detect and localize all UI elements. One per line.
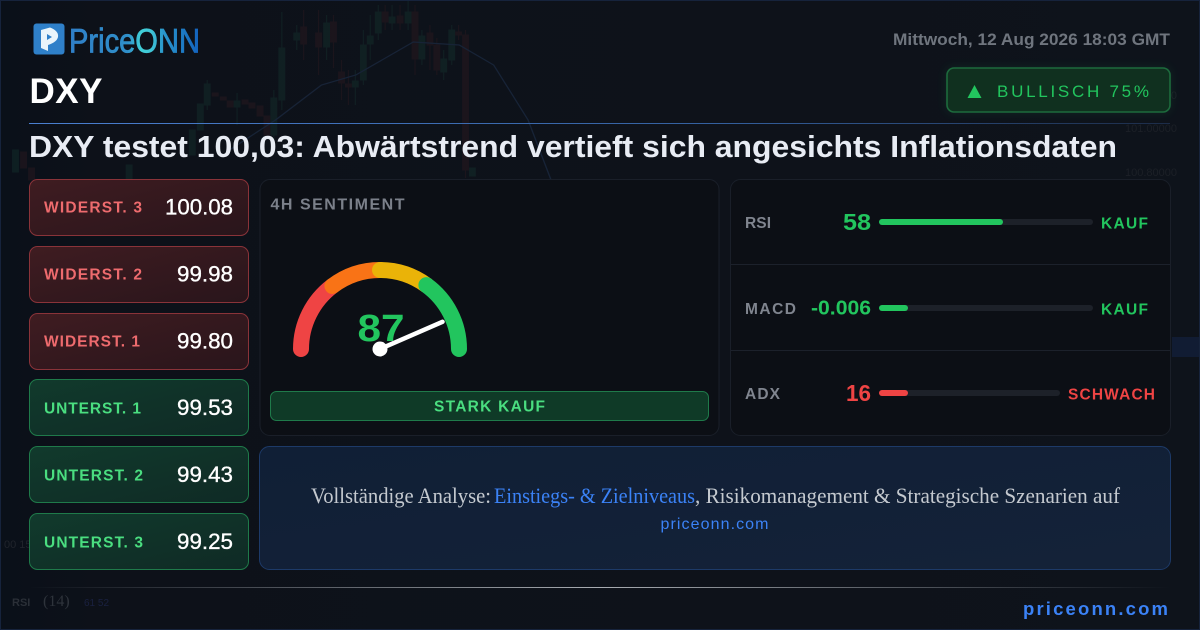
logo wordmark: PriceONN: [69, 22, 200, 60]
call to action panel: [260, 446, 1170, 570]
row: MACD: [745, 298, 1148, 320]
sentiment badge: [946, 68, 1170, 112]
row: MACD: KAUF: [1101, 302, 1148, 318]
value: 99.25: [177, 529, 233, 554]
label: UNTERST. 2: [44, 468, 143, 484]
value: 99.53: [177, 395, 233, 420]
row: RSI: RSI: [745, 215, 771, 232]
row: MACD: MACD: [745, 301, 796, 318]
footer brand: priceonn.com: [1023, 598, 1168, 619]
call to action text: , Risikomanagement & Strategische Szenarien auf: [695, 483, 1121, 508]
logo mark: [34, 24, 64, 54]
footer divider: [29, 587, 1170, 588]
logo: PriceONN: [34, 22, 200, 60]
icon: up triangle: [968, 85, 982, 98]
faint chart backdrop: RSI: [12, 597, 30, 609]
panel heading: 4H SENTIMENT: [270, 196, 405, 214]
panel: support 1: [30, 380, 248, 436]
verdict pill: STARK KAUF: [434, 398, 545, 416]
call to action text: Vollständige Analyse:: [311, 483, 491, 508]
row: ADX: 16: [846, 380, 871, 406]
headline: DXY testet 100,03: Abwärtstrend vertieft sich angesichts Inflationsdaten: [29, 130, 1117, 164]
faint chart backdrop: 100.80000: [1125, 167, 1177, 179]
faint chart backdrop: 101.00000: [1125, 123, 1177, 135]
row: MACD: -0.006: [811, 298, 871, 320]
label: WIDERST. 1: [44, 334, 140, 350]
row: ADX: SCHWACH: [1068, 386, 1155, 404]
row: ADX: ADX: [745, 386, 781, 403]
divider: [29, 123, 1170, 124]
label: WIDERST. 2: [44, 266, 142, 284]
date and time: Mittwoch, 12 Aug 2026 18:03 GMT: [893, 31, 1170, 49]
row: RSI: KAUF: [1101, 216, 1148, 232]
panel: indicators: [730, 180, 1170, 436]
panel: resistance 3: [30, 180, 248, 236]
faint chart backdrop: 101.20000: [1125, 90, 1177, 102]
faint chart backdrop: 61 52: [84, 598, 109, 609]
panel: support 2: [30, 446, 248, 502]
row: RSI: [745, 209, 1148, 235]
faint chart backdrop: (14): [43, 593, 70, 610]
panel: 4H sentiment: [260, 180, 719, 436]
panel: resistance 1: [30, 314, 248, 370]
panel: resistance 2: [30, 246, 248, 302]
row: ADX: [745, 380, 1155, 406]
value: 100.08: [165, 194, 233, 220]
label: WIDERST. 3: [44, 200, 142, 216]
call to action text: Einstiegs- & Zielniveaus: [494, 483, 695, 508]
call to action link: priceonn.com: [660, 516, 768, 533]
gauge needle: [372, 322, 442, 356]
value: 99.80: [177, 328, 233, 354]
faint chart backdrop: 00 15: [4, 539, 32, 551]
verdict pill: [270, 392, 708, 420]
row: RSI: 58: [843, 209, 871, 235]
badge label: BULLISCH 75%: [997, 82, 1149, 101]
value: 99.98: [177, 262, 233, 286]
symbol heading: DXY: [30, 72, 102, 111]
gauge: [301, 270, 459, 356]
gauge value: 87: [358, 308, 404, 350]
label: UNTERST. 3: [44, 534, 143, 552]
value: 99.43: [177, 462, 233, 487]
label: UNTERST. 1: [44, 400, 141, 418]
panel: support 3: [30, 514, 248, 570]
call to action text: [311, 483, 1121, 508]
